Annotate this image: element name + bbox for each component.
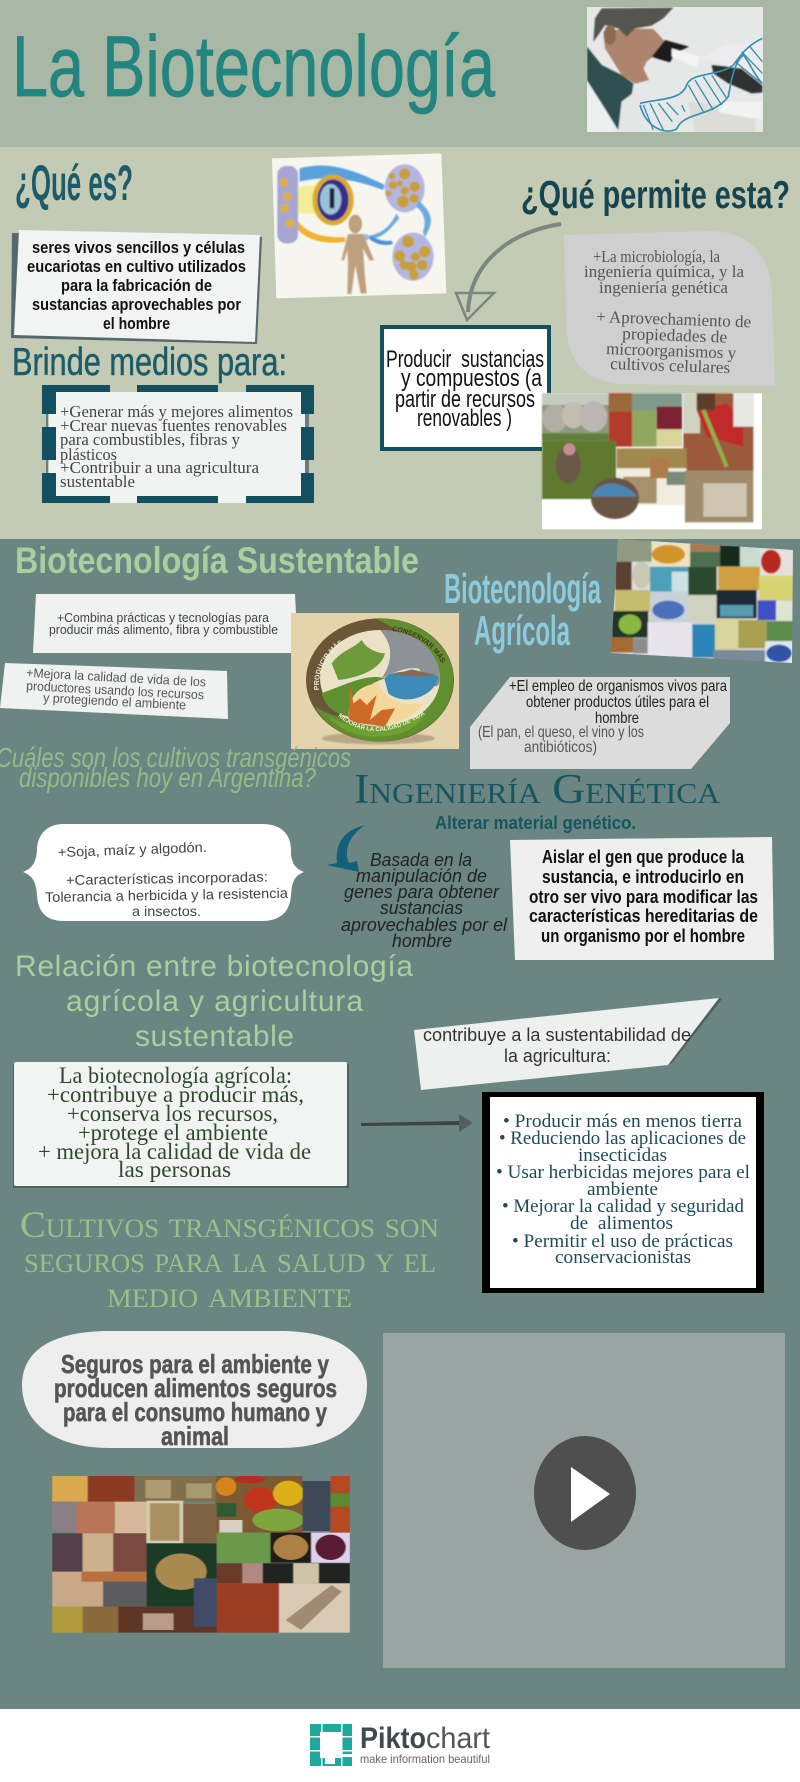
panel: ways of contributing xyxy=(482,1092,764,1293)
text: isolate the gene: un organismo por el hombre xyxy=(541,926,745,946)
text: produce substances: Producir sustancias xyxy=(386,346,544,373)
heading: relation between biotech and agriculture xyxy=(15,950,413,1053)
text: available crops: a insectos. xyxy=(132,903,201,919)
photo: biotech collage xyxy=(611,539,793,663)
text: disciplines: ingeniería química, y la xyxy=(584,262,744,281)
text: list of means xyxy=(60,402,293,491)
text: definition: eucariotas en cultivo utilizados xyxy=(27,257,246,276)
text: agricultural biotech definition xyxy=(478,678,727,756)
text: disciplines: cultivos celulares xyxy=(610,354,730,377)
text: isolate the gene xyxy=(529,847,758,946)
text: isolate the gene: Aislar el gen que produce la xyxy=(542,847,745,867)
heading: transgenic crops are safe: Cultivos transgénicos son xyxy=(20,1205,439,1246)
text: sustainable note 2: productores usando los recursos xyxy=(26,678,205,702)
text: contributes to sustainability: contribuye a la sustentabilidad de xyxy=(423,1025,691,1045)
footer logo: Piktochart xyxy=(310,1722,491,1766)
text: based on gene manipulation: hombre xyxy=(392,931,452,951)
text: safe for environment: animal xyxy=(161,1421,229,1451)
panel: isolate the gene xyxy=(510,837,774,960)
text: sustainable note 1: producir más alimento, fibra y combustible xyxy=(49,622,278,637)
arrow: curved grey arrow xyxy=(456,224,561,320)
text: sustainable note 2: y protegiendo el ambiente xyxy=(43,690,186,712)
heading: transgenic crops are safe xyxy=(20,1205,439,1316)
heading: transgenic crops are safe: medio ambiente xyxy=(107,1275,352,1316)
icon: play button xyxy=(534,1436,636,1550)
heading: question about transgenic crops: disponibles hoy en Argentina? xyxy=(19,762,316,793)
text: ways list: insecticidas xyxy=(578,1145,667,1166)
heading: Biotecnología Agrícola: Biotecnología xyxy=(444,565,601,612)
text: ways list: • Mejorar la calidad y seguridad xyxy=(502,1196,744,1217)
heading: relation between biotech and agriculture: Relación entre biotecnología xyxy=(15,950,413,983)
heading: Ingeniería Genética: Ingeniería Genética xyxy=(354,767,720,813)
text: list of means: +Crear nuevas fuentes renovables xyxy=(60,416,287,435)
background: intro section xyxy=(0,147,800,539)
text: circle labels: CONSERVAR MÁS xyxy=(392,626,446,663)
panel: agricultural biotech definition xyxy=(470,677,730,769)
text: ways list: de alimentos xyxy=(570,1213,673,1234)
text: benefits: +protege el ambiente xyxy=(78,1120,268,1145)
panel: available crops xyxy=(23,824,304,921)
text: benefits: +conserva los recursos, xyxy=(67,1101,278,1126)
text: agricultural biotech definition: +El empleo de organismos vivos para xyxy=(509,678,727,695)
text: list of means: +Contribuir a una agricultura xyxy=(60,458,259,477)
background: header band xyxy=(0,0,800,147)
text: logo tagline: make information beautiful xyxy=(360,1752,490,1766)
text: logo word: Piktochart xyxy=(360,1722,491,1755)
heading: Biotecnología Agrícola: Agrícola xyxy=(474,607,570,654)
text: based on gene manipulation: genes para obtener xyxy=(344,882,500,902)
text: safe for environment xyxy=(54,1349,337,1451)
text: list of means: para combustibles, fibras y xyxy=(60,430,240,449)
text: benefits: +contribuye a producir más, xyxy=(47,1082,304,1107)
text: agricultural biotech definition: antibióticos) xyxy=(524,739,597,756)
text: sustainable note 2 xyxy=(26,665,207,712)
text: benefits: + mejora la calidad de vida de xyxy=(38,1139,311,1164)
text: ways list: • Usar herbicidas mejores para el xyxy=(496,1162,750,1183)
text: definition: sustancias aprovechables por xyxy=(32,295,241,314)
text: based on gene manipulation: manipulación de xyxy=(356,866,487,886)
text: list of means: sustentable xyxy=(60,472,135,491)
subheading: alter genetic material: Alterar material genético. xyxy=(435,813,636,833)
title: La Biotecnología xyxy=(12,19,495,115)
photo: scientist with microscope and DNA xyxy=(587,7,763,132)
arrow: dark teal curved arrow xyxy=(327,825,365,872)
heading: ¿Qué es?: ¿Qué es? xyxy=(15,155,133,211)
text: agricultural biotech definition: obtener productos útiles para el xyxy=(526,694,709,711)
text: available crops: Tolerancia a herbicida y la resistencia xyxy=(45,885,288,905)
arrow: straight grey arrow xyxy=(361,1114,473,1132)
text: ways list: • Reduciendo las aplicaciones de xyxy=(499,1128,746,1149)
text: circle labels xyxy=(314,626,446,732)
heading: Biotecnología Sustentable: Biotecnología Sustentable xyxy=(15,540,419,581)
text: disciplines: ingeniería genética xyxy=(599,278,728,297)
panel: produce substances xyxy=(382,327,549,449)
text: safe for environment: producen alimentos seguros xyxy=(54,1373,337,1403)
panel: agricultural biotechnology benefits xyxy=(13,1062,349,1188)
video placeholder xyxy=(383,1333,785,1668)
text: contributes to sustainability: la agricultura: xyxy=(504,1046,611,1066)
background: footer xyxy=(0,1709,800,1782)
background: main teal section xyxy=(0,539,800,1709)
text: produce substances: partir de recursos xyxy=(395,386,535,413)
text: safe for environment: Seguros para el ambiente y xyxy=(61,1349,329,1379)
panel: sustainable note 1 xyxy=(33,594,298,653)
text: available crops: +Características incorporadas: xyxy=(66,868,268,888)
text: disciplines: +La microbiología, la xyxy=(593,247,720,266)
text: isolate the gene: sustancia, e introducirlo en xyxy=(542,867,744,887)
text: available crops xyxy=(45,839,288,919)
heading: question about transgenic crops: Cuáles son los cultivos transgénicos xyxy=(0,742,351,773)
text: circle labels: MEJORAR LA CALIDAD DE VIDA xyxy=(338,712,425,732)
panel: sustainable note 2 xyxy=(0,663,228,719)
text: ways list: conservacionistas xyxy=(555,1247,691,1268)
text: available crops: +Soja, maíz y algodón. xyxy=(58,839,207,860)
text: benefits xyxy=(38,1063,311,1182)
text: definition: el hombre xyxy=(103,314,170,333)
text: isolate the gene: características hereditarias de xyxy=(529,906,758,926)
text: safe for environment: para el consumo humano y xyxy=(63,1397,327,1427)
text: produce substances: y compuestos (a xyxy=(401,365,543,392)
text: agricultural biotech definition: (El pan, el queso, el vino y los xyxy=(478,724,644,741)
text: ways list: • Permitir el uso de prácticas xyxy=(512,1231,733,1252)
icon: Piktochart mark xyxy=(310,1724,352,1766)
panel: definition xyxy=(11,230,262,344)
heading: question about transgenic crops xyxy=(0,742,351,793)
text: disciplines: + Aprovechamiento de xyxy=(596,307,751,331)
text: definition: para la fabricación de xyxy=(61,276,212,295)
heading: Brinde medios para: Brinde medios para: xyxy=(12,341,287,384)
text: ways list: • Producir más en menos tierra xyxy=(503,1111,743,1132)
text: disciplines: microorganismos y xyxy=(606,339,737,363)
photo: food collage xyxy=(52,1475,350,1633)
text: benefits: La biotecnología agrícola: xyxy=(59,1063,292,1088)
text: isolate the gene: otro ser vivo para modificar las xyxy=(529,887,758,907)
image: sustainability circle xyxy=(291,613,459,749)
heading: relation between biotech and agriculture: sustentable xyxy=(135,1020,294,1053)
text: list of means: +Generar más y mejores alimentos xyxy=(60,402,293,421)
text: agricultural biotech definition: hombre xyxy=(595,710,639,727)
text: based on gene manipulation: sustancias xyxy=(380,898,463,918)
text: contributes to sustainability xyxy=(423,1025,691,1066)
heading: relation between biotech and agriculture: agrícola y agricultura xyxy=(66,985,363,1018)
heading: transgenic crops are safe: seguros para la salud y el xyxy=(24,1240,436,1281)
text: definition: seres vivos sencillos y células xyxy=(32,238,245,257)
text: ways list: ambiente xyxy=(587,1179,658,1200)
image: biotech process diagram xyxy=(272,153,446,298)
text: based on gene manipulation: aprovechables por el xyxy=(341,915,508,935)
heading: Biotecnología Agrícola xyxy=(444,565,601,654)
text: definition xyxy=(27,238,246,333)
text: sustainable note 1 xyxy=(49,610,278,637)
text: based on gene manipulation: Basada en la xyxy=(370,850,472,870)
text: based on gene manipulation xyxy=(341,850,508,951)
text: list of means: plásticos xyxy=(60,445,117,464)
text: produce substances xyxy=(386,346,544,432)
text: circle labels: PRODUCIR MÁS xyxy=(314,640,342,690)
panel: provides means xyxy=(42,385,314,503)
photo: farm collage xyxy=(542,393,762,529)
text: sustainable note 2: +Mejora la calidad de vida de los xyxy=(26,665,207,689)
panel: contributes to sustainability xyxy=(414,998,722,1090)
panel: safe for environment xyxy=(22,1331,367,1451)
text: benefits: las personas xyxy=(118,1157,231,1182)
panel: what it allows xyxy=(564,231,775,386)
text: sustainable note 1: +Combina prácticas y tecnologías para xyxy=(57,610,270,625)
text: ways list xyxy=(496,1111,750,1268)
text: produce substances: renovables ) xyxy=(417,405,512,432)
text: disciplines xyxy=(584,247,751,377)
text: disciplines: propiedades de xyxy=(622,324,727,347)
